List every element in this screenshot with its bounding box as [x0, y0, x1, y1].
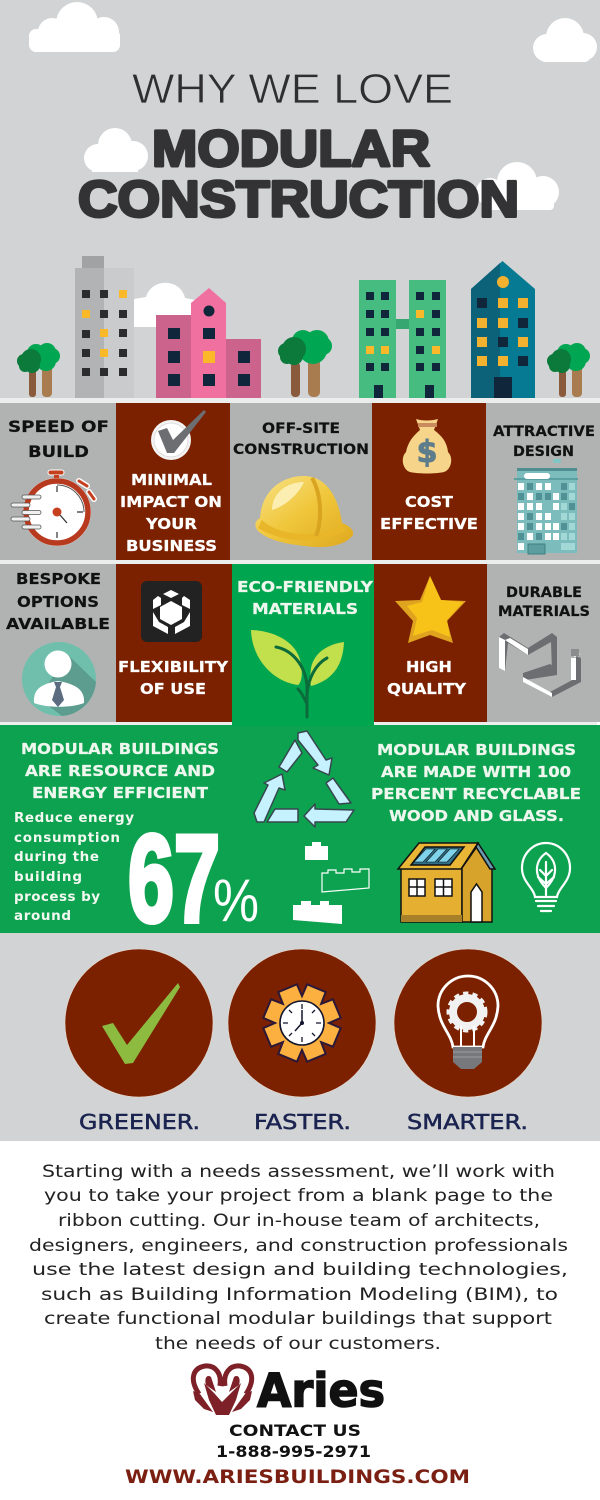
- text block: resource and energy efficient: ENERGY EFFICIENT: [32, 784, 209, 802]
- icon: cube block: [141, 581, 202, 642]
- wordmark: Aries: [257, 1364, 385, 1418]
- text block: reduce energy: Reduce energy: [14, 810, 134, 826]
- phone number: 1-888-995-2971: [216, 1442, 371, 1461]
- tree group: right: [547, 343, 590, 397]
- building: grey tower: [75, 256, 134, 398]
- text block: description: such as Building Information Modeling (BIM), to: [41, 1285, 558, 1305]
- heading line 2: CONSTRUCTION: [233, 442, 369, 458]
- heading: DURABLE: [506, 585, 582, 601]
- label line 3: YOUR: [145, 515, 197, 533]
- label line 1: MINIMAL: [131, 471, 212, 489]
- tree group: left: [17, 343, 60, 397]
- icon: hard hat: [255, 476, 353, 547]
- text block: description: Starting with a needs assessment, we’ll work with: [42, 1162, 555, 1182]
- panel: speed of build: [8, 417, 109, 546]
- text block: reduce energy: during the: [14, 849, 99, 865]
- icon: toy bricks: [293, 842, 369, 924]
- feature row 1: [0, 398, 600, 560]
- icon: ram head: [193, 1366, 252, 1415]
- panel: cost effective: [372, 403, 486, 560]
- panel: flexibility of use: [116, 564, 232, 722]
- cloud: top left: [29, 2, 120, 52]
- building: pink house: [156, 288, 261, 398]
- icon: money bag: $: [417, 435, 437, 470]
- cloud: behind title right: [476, 162, 559, 210]
- panel: attractive design: [493, 424, 595, 554]
- building: green twin towers: [359, 280, 446, 398]
- text block: reduce energy: building: [14, 869, 82, 885]
- icon: stopwatch: [11, 470, 94, 546]
- label line 1: FLEXIBILITY: [118, 658, 229, 676]
- text block: recyclable wood and glass: MODULAR BUILDINGS: [377, 741, 576, 759]
- icon: check badge: [151, 410, 206, 460]
- label: GREENER.: [79, 1110, 200, 1134]
- text block: description: the needs of our customers.: [155, 1334, 441, 1354]
- contact heading: CONTACT US: [229, 1421, 361, 1440]
- label line 2: IMPACT ON: [120, 493, 222, 511]
- title: construction: CONSTRUCTION: [78, 170, 519, 228]
- item: faster: [228, 949, 376, 1134]
- text block: description: [29, 1162, 568, 1354]
- icon: money bag: [403, 419, 451, 474]
- label line 4: BUSINESS: [126, 537, 217, 555]
- heading line 2: MATERIALS: [498, 604, 590, 620]
- icon: star: [395, 576, 466, 643]
- panel: bespoke options: [6, 570, 110, 716]
- text block: resource and energy efficient: [21, 740, 219, 802]
- text block: reduce energy: around: [14, 908, 71, 924]
- text block: description: use the latest design and building technologies,: [32, 1260, 568, 1280]
- label line 2: MATERIALS: [252, 600, 358, 618]
- logo: Aries: [193, 1364, 385, 1418]
- tree group: centre: [278, 330, 332, 397]
- icon: isometric MZi logo: [499, 633, 581, 697]
- text block: description: create functional modular buildings that support: [44, 1309, 552, 1329]
- icon: recycle arrows: [254, 731, 354, 827]
- icon: business person: [22, 642, 96, 716]
- label line 2: QUALITY: [387, 680, 467, 698]
- website: WWW.ARIESBUILDINGS.COM: [125, 1466, 470, 1488]
- icon: eco light bulb: [522, 843, 570, 911]
- heading: BESPOKE: [16, 570, 101, 588]
- text block: description: ribbon cutting. Our in-house team of architects,: [58, 1211, 540, 1231]
- heading line 2: OPTIONS: [17, 593, 99, 611]
- icon: green check: [102, 983, 180, 1064]
- panel: greener faster smarter: [0, 933, 600, 1141]
- title: modular: MODULAR: [152, 120, 430, 177]
- label line 1: HIGH: [406, 658, 452, 676]
- label line 2: EFFECTIVE: [380, 515, 478, 533]
- text block: reduce energy: process by: [14, 889, 100, 905]
- heading: ATTRACTIVE: [493, 424, 595, 440]
- label: SMARTER.: [407, 1110, 528, 1134]
- text block: recyclable wood and glass: ARE MADE WITH 100: [381, 763, 571, 781]
- label: FASTER.: [254, 1110, 351, 1134]
- panel: eco-friendly materials: [232, 564, 374, 725]
- heading line 2: DESIGN: [513, 444, 574, 460]
- heading: SPEED OF: [8, 417, 109, 436]
- cloud: behind pink building: [134, 283, 200, 327]
- text block: description: designers, engineers, and construction professionals: [29, 1236, 568, 1256]
- feature row 2: [0, 560, 600, 725]
- text block: resource and energy efficient: ARE RESOURCE AND: [25, 762, 215, 780]
- heading line 2: BUILD: [28, 442, 89, 461]
- icon: sprout: [251, 630, 344, 717]
- label line 1: ECO-FRIENDLY: [237, 578, 374, 596]
- statistic: percent sign: %: [213, 867, 259, 934]
- text block: reduce energy: consumption: [14, 830, 120, 846]
- panel: minimal impact: [116, 403, 230, 560]
- text block: recyclable wood and glass: [371, 741, 581, 825]
- text block: reduce energy: [14, 810, 134, 924]
- cloud: behind title left: [84, 128, 148, 172]
- panel: durable materials: [498, 585, 590, 697]
- title: why we love: WHY WE LOVE: [132, 65, 453, 112]
- icon: office building: [514, 459, 578, 554]
- text block: recyclable wood and glass: WOOD AND GLASS.: [389, 807, 564, 825]
- statistic: 67: 67: [128, 810, 220, 948]
- panel: off-site construction: [233, 421, 369, 547]
- label line 1: COST: [405, 493, 454, 511]
- building: teal gabled tower: [471, 261, 535, 398]
- icon: gear clock: [263, 984, 341, 1062]
- heading: OFF-SITE: [262, 421, 340, 437]
- panel: header sky: [0, 0, 600, 400]
- panel: green statistics: [0, 722, 600, 948]
- panel: high quality: [374, 564, 487, 722]
- icon: gear bulb: [438, 976, 498, 1069]
- text block: resource and energy efficient: MODULAR BUILDINGS: [21, 740, 219, 758]
- item: greener: [65, 949, 213, 1134]
- text block: description: you to take your project from a blank page to the: [44, 1186, 553, 1206]
- item: smarter: [394, 949, 542, 1134]
- icon: solar house: [398, 843, 495, 922]
- label line 2: OF USE: [140, 680, 206, 698]
- cloud: top right: [533, 18, 597, 62]
- text block: recyclable wood and glass: PERCENT RECYCLABLE: [371, 785, 581, 803]
- heading line 3: AVAILABLE: [6, 615, 110, 633]
